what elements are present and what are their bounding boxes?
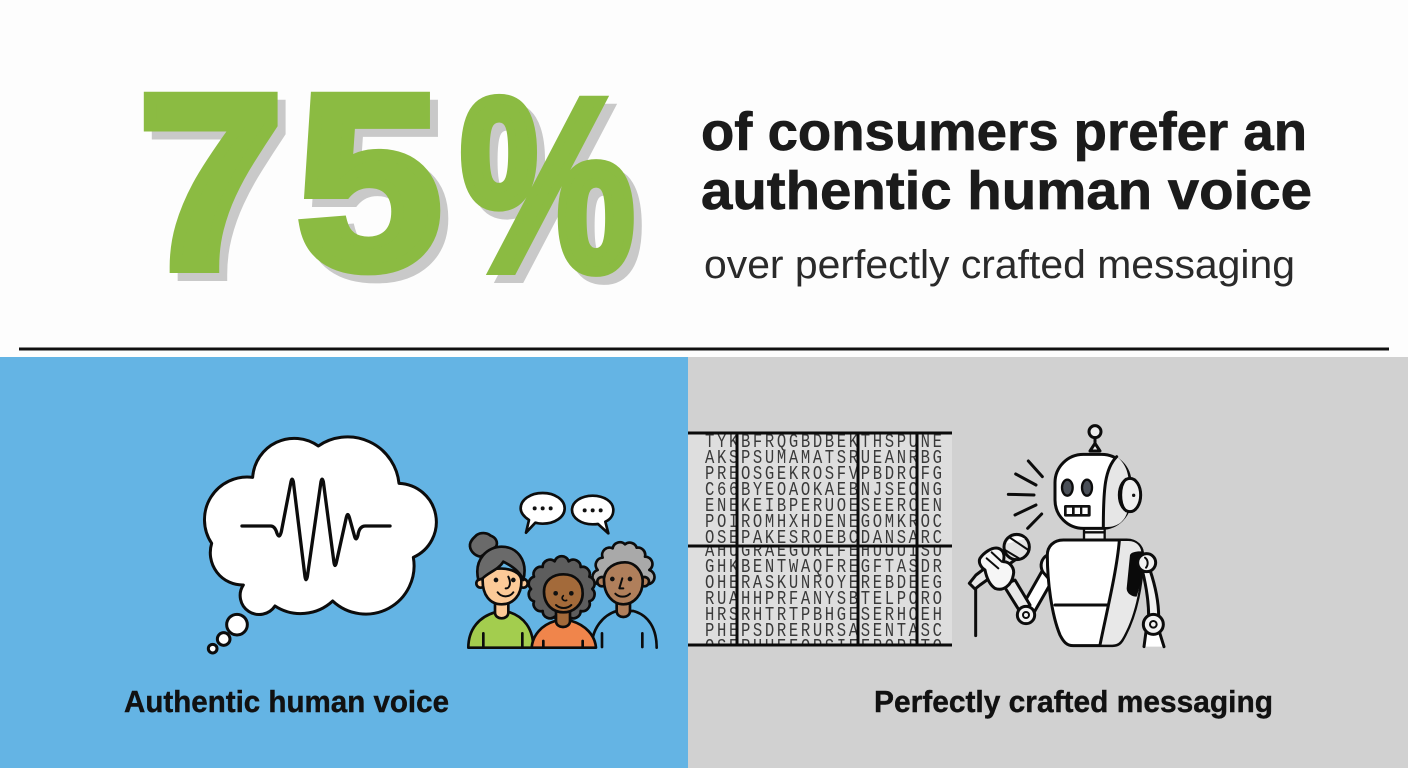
head [1055, 454, 1130, 528]
label: perfectly crafted messaging: Perfectly crafted messaging [874, 684, 1273, 719]
stat shadow: % [468, 56, 643, 331]
panel: authentic human voice [0, 357, 688, 768]
left arm and hand [1003, 555, 1052, 624]
label: authentic human voice: Authentic human voice [124, 684, 449, 719]
text grid block: AKSPSUMAMATSRUEANRBG [705, 449, 942, 470]
ear [1119, 478, 1141, 512]
headline: of consumers prefer an [701, 102, 1307, 162]
icon: robot with microphone [969, 426, 1164, 647]
stat shadow [147, 54, 643, 331]
text grid block: OSEPAKESROEBCDANSARC [705, 529, 942, 550]
body [1047, 540, 1143, 646]
icon: three people talking [468, 493, 657, 648]
shoulder joint [1138, 554, 1156, 572]
text grid block: POIROMHXHDENEGOMKROC [705, 513, 942, 534]
text grid block: PREOSGEKROSFVPBDRCFG [705, 465, 942, 486]
sound lines [1008, 461, 1042, 528]
big stat: 75% [139, 46, 643, 331]
text grid block: HRSRHTRTPBHGESERHOEH [705, 606, 942, 627]
text grid block: OHERASKUNROYEREBDEEG [705, 574, 942, 595]
text grid block: AHUGRAEGORLFEHUUUISU [705, 542, 942, 563]
neck [1084, 528, 1105, 540]
stat number: 75 [139, 46, 441, 320]
panel: perfectly crafted messaging [688, 357, 1408, 768]
antenna [1089, 426, 1101, 451]
stat number: % [460, 48, 635, 323]
text grid block: GHKBENTWAQFREGFTASDR [705, 558, 942, 579]
headline: authentic human voice [701, 161, 1312, 221]
icon: thought cloud with waveform [204, 437, 436, 653]
speech bubbles [521, 493, 613, 533]
microphone with hand [969, 534, 1029, 636]
text grid block: OSERHUEFORSIEFROPRTO [705, 638, 942, 659]
person: left [468, 533, 533, 648]
stat number [139, 46, 635, 323]
person: centre [529, 556, 596, 648]
text grid block: RUAHHPRFANYSBTELPORO [705, 590, 942, 611]
subheadline: over perfectly crafted messaging [704, 243, 1295, 287]
person: right [592, 542, 657, 648]
text grid block: PHEPSDRERURSASENTASC [705, 622, 942, 643]
headline [701, 102, 1312, 221]
right arm [1143, 570, 1164, 647]
text grid block: ENEKEIBPERUOESEERCEN [705, 497, 942, 518]
text grid block: TYKBFRQGBDBEKTHSPUNE [705, 433, 942, 454]
text grid block [688, 433, 952, 659]
stat shadow: 75 [147, 54, 449, 328]
text grid block: C66BYEOAOKAEBNJSEONG [705, 481, 942, 502]
